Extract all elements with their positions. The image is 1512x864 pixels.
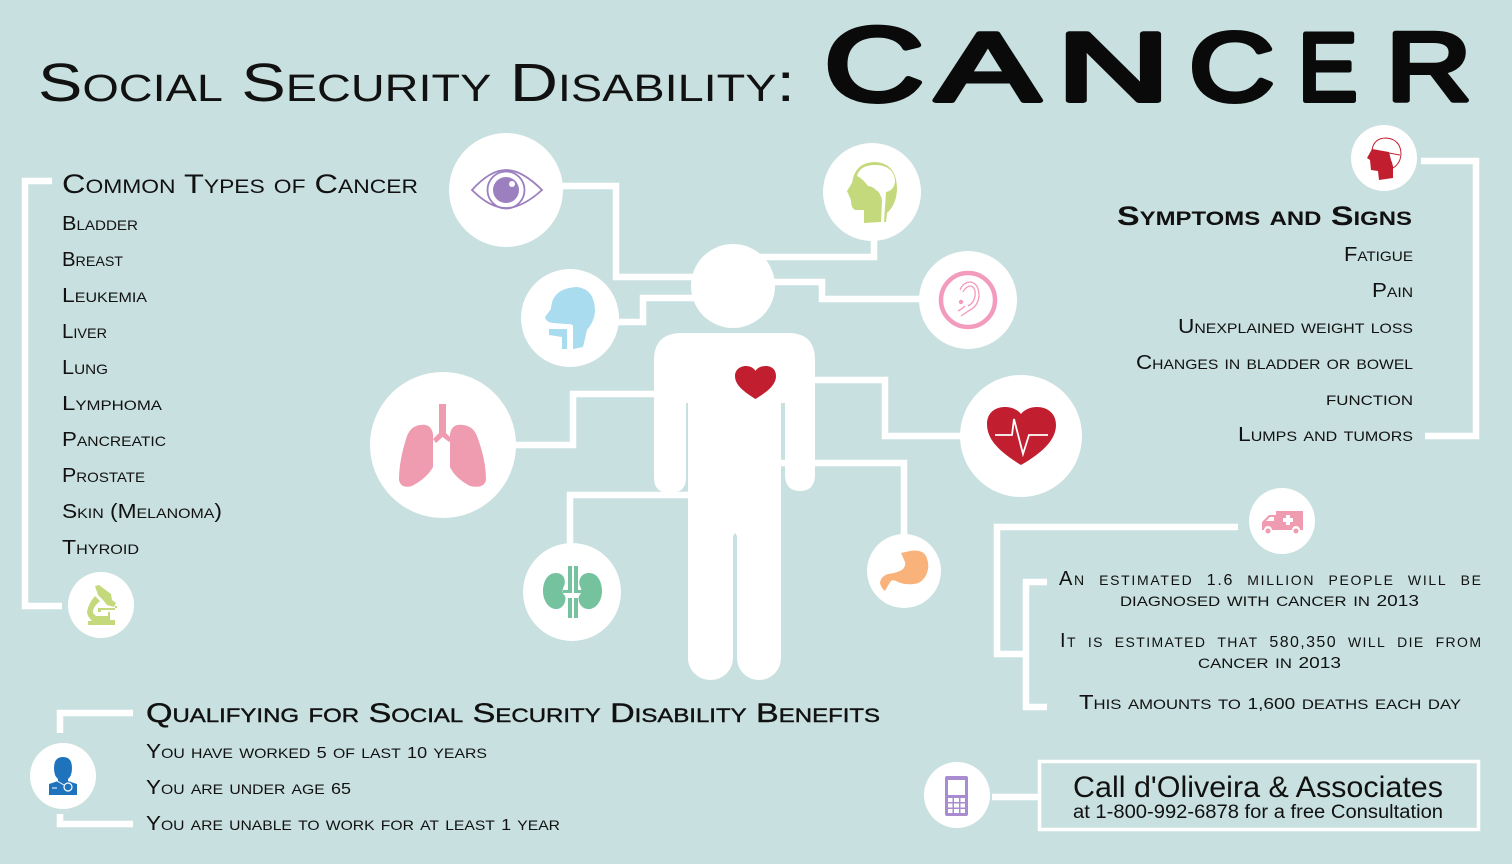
list of cancer types: Thyroid xyxy=(62,537,139,559)
icon: microscope xyxy=(68,572,134,638)
icon: mobile phone xyxy=(924,762,990,828)
icon: stomach xyxy=(867,534,941,608)
list of symptoms: Changes in bladder or bowel xyxy=(1136,352,1413,374)
contact box: Call d'Oliveira & Associates xyxy=(1073,771,1443,804)
contact box xyxy=(1040,762,1478,830)
list of cancer types: Lymphoma xyxy=(62,393,163,415)
title: N xyxy=(1057,12,1170,121)
icon: brain xyxy=(823,143,921,241)
qualifying criteria list: You are under age 65 xyxy=(146,777,351,799)
list of cancer types: Lung xyxy=(62,357,108,379)
list of cancer types: Breast xyxy=(62,249,123,271)
icon: eye xyxy=(449,133,563,247)
icon: ambulance xyxy=(1249,488,1315,554)
statistics text: diagnosed with cancer in 2013 xyxy=(1120,589,1419,611)
qualifying criteria list: You are unable to work for at least 1 year xyxy=(146,813,560,835)
list of symptoms xyxy=(1136,244,1413,446)
connector lines xyxy=(512,186,965,550)
list of symptoms: Pain xyxy=(1372,280,1413,302)
list of symptoms: function xyxy=(1326,388,1413,410)
list of cancer types: Skin (Melanoma) xyxy=(62,501,222,523)
icon: lungs xyxy=(370,372,516,518)
icon: doctor xyxy=(30,743,96,809)
panel: statistics xyxy=(997,488,1481,714)
list of cancer types: Leukemia xyxy=(62,285,148,307)
panel: call to action xyxy=(924,762,1478,830)
human body figure xyxy=(654,244,815,680)
qualifying criteria list xyxy=(146,741,560,835)
list of cancer types: Pancreatic xyxy=(62,429,166,451)
icon: kidneys xyxy=(523,543,621,641)
statistics text: This amounts to 1,600 deaths each day xyxy=(1079,692,1462,714)
icon: ear xyxy=(919,251,1017,349)
list of symptoms: Lumps and tumors xyxy=(1238,424,1413,446)
qualifying criteria list: You have worked 5 of last 10 years xyxy=(146,741,487,763)
icon: heart with pulse xyxy=(960,375,1082,497)
list of cancer types xyxy=(62,213,222,559)
statistics text: It is estimated that 580,350 will die from xyxy=(1060,630,1481,652)
icon: head and throat xyxy=(521,269,619,367)
heading: qualifying: Qualifying for Social Security Disability Benefits xyxy=(146,698,880,728)
heading: common types of cancer: Common Types of Cancer xyxy=(62,169,418,199)
heading: symptoms and signs: Symptoms and Signs xyxy=(1117,201,1412,231)
statistics text xyxy=(1059,568,1481,714)
list of symptoms: Fatigue xyxy=(1344,244,1413,266)
list of cancer types: Bladder xyxy=(62,213,138,235)
list of symptoms: Unexplained weight loss xyxy=(1178,316,1413,338)
title xyxy=(38,7,1471,124)
title: R xyxy=(1386,13,1471,121)
icon: small heart on chest xyxy=(735,366,776,399)
list of cancer types: Liver xyxy=(62,321,107,343)
panel: qualifying for benefits xyxy=(30,698,880,835)
contact box: at 1-800-992-6878 for a free Consultation xyxy=(1073,802,1443,823)
list of cancer types: Prostate xyxy=(62,465,145,487)
icon: head with red face xyxy=(1351,125,1417,191)
title: A xyxy=(936,14,1040,121)
panel: symptoms and signs xyxy=(1117,125,1476,446)
title: C xyxy=(1189,13,1274,121)
title: C xyxy=(824,7,924,124)
title: Social Security Disability: xyxy=(38,53,795,113)
panel: common types of cancer xyxy=(25,169,418,638)
statistics text: cancer in 2013 xyxy=(1198,651,1341,673)
title: E xyxy=(1298,13,1358,121)
statistics text: An estimated 1.6 million people will be xyxy=(1059,568,1481,590)
